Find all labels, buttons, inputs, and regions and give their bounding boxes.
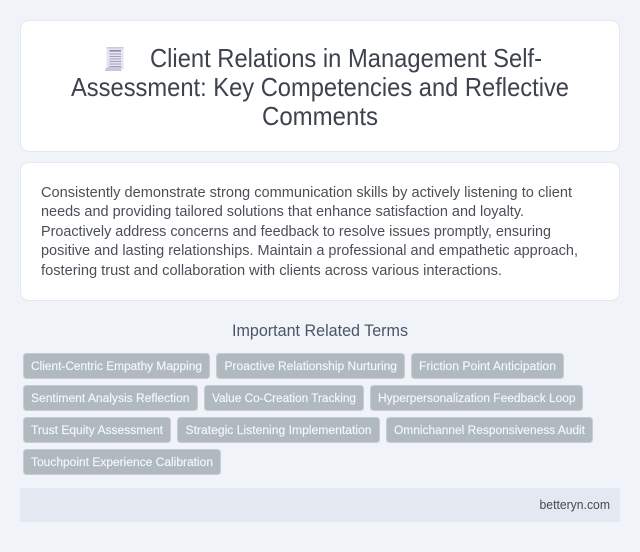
title: Comments (262, 101, 378, 131)
tag (370, 386, 582, 410)
tag: Friction Point Anticipation (419, 359, 556, 373)
tag (24, 386, 198, 410)
tag: Omnichannel Responsiveness Audit (394, 423, 586, 437)
text block: self-assessment summary: needs and providing tailored solutions that enhance satisfaction and loyalty. (41, 204, 524, 220)
tag: Client-Centric Empathy Mapping (31, 359, 202, 373)
tag: Strategic Listening Implementation (186, 423, 372, 437)
panel: related term tags (24, 354, 592, 474)
tag (24, 450, 220, 474)
title: Client Relations in Management Self- (150, 43, 542, 73)
text block: self-assessment summary: positive and lasting relationships. Maintain a professional and empathetic approach, (41, 243, 578, 259)
title (71, 43, 569, 131)
text block: self-assessment summary (41, 185, 578, 279)
tag (24, 354, 210, 378)
title: Assessment: Key Competencies and Reflective (71, 72, 569, 102)
tag (216, 354, 404, 378)
tag: Proactive Relationship Nurturing (224, 359, 397, 373)
text block: self-assessment summary: Consistently demonstrate strong communication skills by actively listening to client (41, 185, 572, 201)
icon: receipt (105, 47, 124, 71)
tag: Trust Equity Assessment (31, 423, 164, 437)
tag: Value Co-Creation Tracking (212, 391, 356, 405)
panel: title card (20, 20, 620, 152)
tag (412, 354, 564, 378)
tag: Touchpoint Experience Calibration (31, 455, 213, 469)
tag: Sentiment Analysis Reflection (31, 391, 190, 405)
panel: summary card (20, 162, 620, 300)
tag (178, 418, 380, 442)
footer: source site: betteryn.com (540, 497, 610, 512)
tag (24, 418, 170, 442)
tag (204, 386, 364, 410)
text block: self-assessment summary: Proactively address concerns and feedback to resolve issues promptly, ensuring (41, 224, 551, 240)
heading: important related terms: Important Related Terms (232, 322, 408, 340)
text block: self-assessment summary: fostering trust and collaboration with clients across various interactions. (41, 263, 502, 279)
tag: Hyperpersonalization Feedback Loop (378, 391, 576, 405)
footer bar (20, 488, 620, 522)
tag (386, 418, 592, 442)
